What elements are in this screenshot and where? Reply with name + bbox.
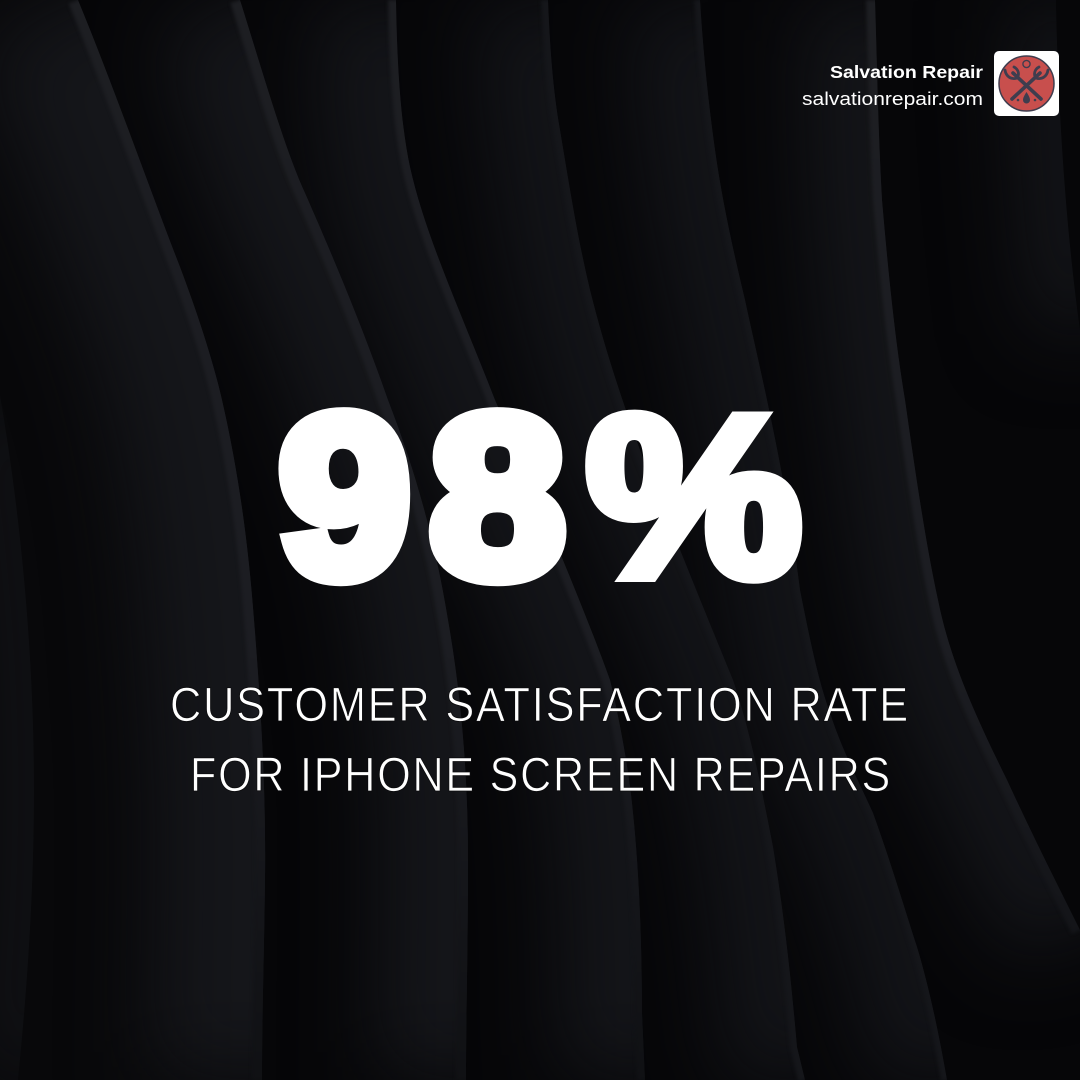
brand name: Salvation Repair <box>830 62 983 82</box>
icon: logo crossed wrenches <box>994 51 1059 116</box>
headline statistic: 98%: 9 <box>279 370 410 625</box>
caption: FOR IPHONE SCREEN REPAIRS <box>190 749 892 802</box>
headline statistic: 98%: % <box>586 369 802 625</box>
headline statistic: 98%: 8 <box>430 369 565 625</box>
caption: CUSTOMER SATISFACTION RATE <box>170 679 910 732</box>
caption <box>170 679 910 802</box>
brand website: salvationrepair.com <box>802 89 983 109</box>
brand block <box>802 51 1059 116</box>
headline statistic: 98% <box>279 369 802 625</box>
